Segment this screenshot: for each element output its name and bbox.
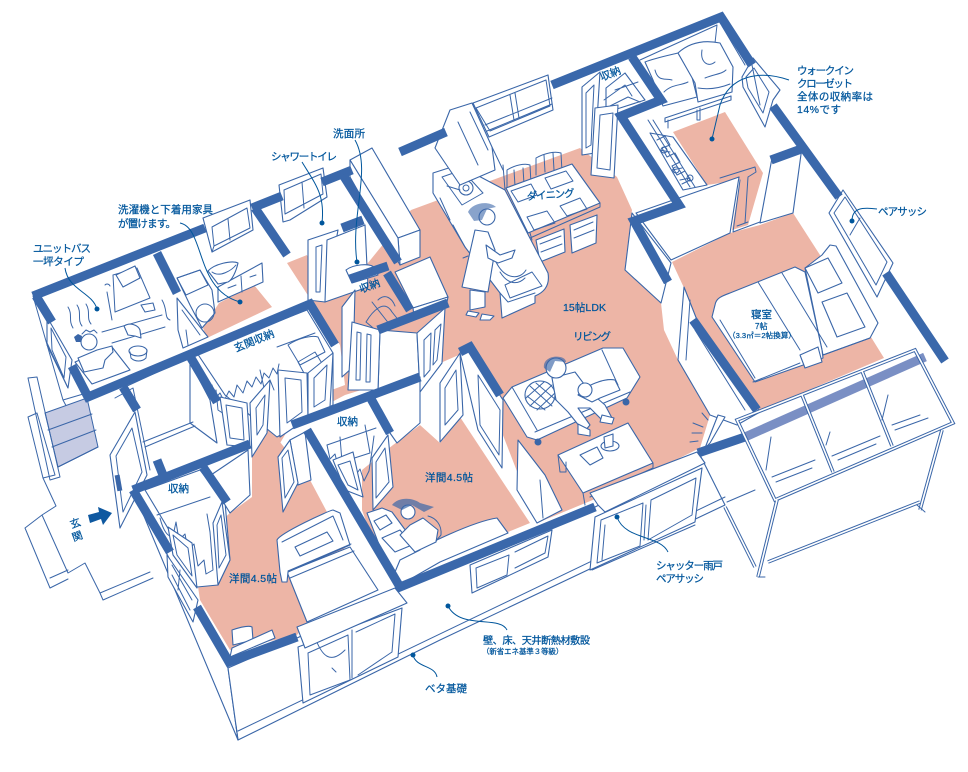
room labels: 収納 [337, 415, 358, 428]
label: shower toilet: シャワートイレ [271, 151, 337, 163]
room labels: （3.3㎡＝2帖換算） [728, 330, 796, 340]
entrance porch [25, 478, 153, 600]
centre window [470, 530, 552, 593]
floor: western room left [192, 442, 350, 650]
single bed [277, 510, 378, 622]
left room window [167, 555, 198, 622]
floor: bedroom [672, 213, 884, 412]
sunroom [725, 350, 953, 577]
room labels: 洋間4.5帖 [425, 471, 474, 484]
label: shutter and pair sash: シャッター雨戸 [656, 560, 723, 572]
woman cooking [462, 203, 515, 320]
room labels: 15帖LDK [563, 301, 606, 314]
bedroom partition and door [678, 287, 760, 448]
label: insulation [446, 604, 590, 656]
toilet window and fittings [279, 168, 378, 302]
walk-in window [742, 58, 780, 127]
left room closet and clothes [145, 450, 250, 588]
center room doors [440, 350, 562, 523]
room labels: 収納 [168, 482, 189, 495]
label: shutter and pair sash: ペアサッシ [656, 573, 704, 585]
label: laundry: が置けます。 [118, 217, 176, 230]
label: pair sash bedroom: ペアサッシ [878, 206, 927, 218]
double bed [712, 245, 878, 382]
label: unit bath: ユニットバス [33, 243, 91, 255]
room labels: 収納 [598, 64, 623, 84]
bath window [47, 317, 72, 388]
sofa with person and dog [503, 348, 640, 446]
laundry window and washer [177, 200, 263, 348]
entry hall face [125, 358, 217, 447]
label: walk-in closet: 全体の収納率は [797, 90, 873, 103]
coffee table [558, 423, 653, 505]
center room desk and girl [367, 499, 508, 585]
entrance storage [197, 310, 333, 457]
label: pair sash bedroom [850, 206, 927, 224]
label: walk-in closet: ウォークイン [797, 65, 854, 77]
floor: western room centre [362, 417, 530, 585]
walk-in partition faces [625, 147, 802, 303]
floor: laundry room [203, 285, 272, 338]
label: shutter and pair sash [614, 514, 723, 585]
label: insulation: （新省エネ基準３等級） [482, 647, 563, 656]
kitchen counter and range hood [433, 103, 548, 318]
walk-in closet contents [640, 25, 745, 190]
structural walls [33, 17, 945, 662]
room labels: 収納 [358, 276, 382, 296]
room labels: ダイニング [526, 187, 576, 203]
label: unit bath: 一坪タイプ [33, 255, 84, 268]
entrance label and arrow: 玄 [68, 515, 83, 531]
label: unit bath [33, 243, 100, 312]
label: laundry [118, 203, 242, 304]
storage doors by dining [582, 72, 645, 178]
label: walk-in closet [710, 65, 873, 142]
storage and cabinet block [342, 257, 448, 392]
roll shutter and sash window left [297, 588, 407, 703]
label: walk-in closet: 14%です [797, 104, 841, 116]
roll shutter and sash window right [590, 452, 705, 570]
dining table and chairs [506, 152, 600, 262]
label: shower toilet [271, 151, 337, 226]
room labels: 玄関収納 [232, 327, 276, 355]
left room desk [230, 626, 275, 657]
label: insulation: 壁、床、天井断熱材敷設 [483, 634, 590, 647]
exterior walls and foundation [33, 296, 725, 740]
entrance label and arrow: 関 [71, 529, 85, 544]
room labels [168, 64, 796, 585]
label: foundation: ベタ基礎 [425, 682, 468, 695]
room labels: 7帖 [755, 321, 767, 331]
label: washroom: 洗面所 [333, 127, 366, 140]
entrance label and arrow [68, 507, 112, 544]
bedroom window [829, 190, 893, 297]
room door left [278, 432, 311, 512]
room labels: 寝室 [751, 308, 772, 321]
centre room closet and clothes [327, 377, 420, 510]
floor: walk-in closet [673, 112, 763, 230]
label: walk-in closet: クローゼット [797, 78, 853, 90]
outdoor unit with lavender panel [28, 377, 98, 480]
bathroom fixtures and bather [68, 266, 170, 384]
entrance door [110, 388, 150, 528]
label: foundation [410, 652, 468, 695]
label: laundry: 洗濯機と下着用家具 [118, 203, 214, 216]
room labels: 洋間4.5帖 [229, 572, 278, 585]
floor: hall and LDK [252, 148, 710, 523]
kitchen back window [473, 75, 553, 137]
room labels: リビング [573, 330, 612, 343]
label: washroom [333, 127, 366, 264]
wash stand [350, 148, 420, 265]
